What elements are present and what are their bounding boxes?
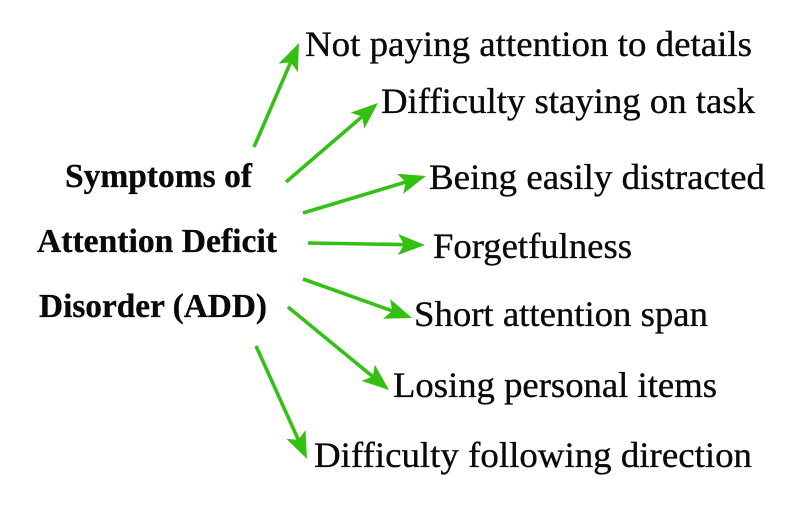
- symptom: difficulty staying on task: Difficulty staying on task: [381, 81, 755, 121]
- arrow: to losing personal items: [288, 307, 381, 384]
- symptom: difficulty following direction: Difficulty following direction: [314, 435, 752, 475]
- symptom: not paying attention to details: Not paying attention to details: [305, 24, 752, 64]
- arrow: to being easily distracted: [303, 179, 416, 213]
- arrow: to difficulty following direction: [256, 346, 303, 450]
- title: symptoms of attention deficit disorder: Symptoms of: [65, 158, 253, 195]
- arrow: to forgetfulness: [308, 243, 415, 245]
- symptom: short attention span: Short attention span: [414, 294, 708, 334]
- arrow: to difficulty staying on task: [286, 110, 370, 182]
- arrow: to short attention span: [303, 279, 403, 315]
- title: symptoms of attention deficit disorder: Disorder (ADD): [39, 288, 267, 325]
- title: symptoms of attention deficit disorder: Attention Deficit: [37, 223, 278, 260]
- symptom: losing personal items: Losing personal items: [393, 365, 717, 405]
- symptom: being easily distracted: Being easily distracted: [429, 157, 765, 197]
- arrow: to not paying attention to details: [254, 52, 295, 147]
- title: symptoms of attention deficit disorder: [37, 158, 278, 325]
- symptom: forgetfulness: Forgetfulness: [433, 226, 632, 266]
